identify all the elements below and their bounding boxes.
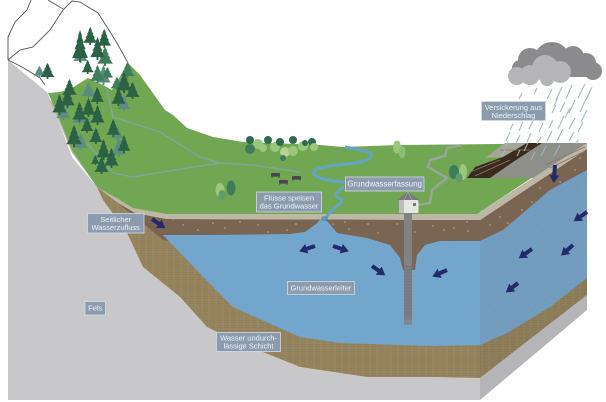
label: Seitlicher Wasserzufluss: Seitlicher [100,215,132,224]
label: Seitlicher Wasserzufluss: Wasserzufluss [91,223,140,232]
spring marker [322,217,327,220]
river [314,147,371,218]
label: Wasser undurchlässige Schicht: Wasser undurch- [220,334,277,342]
conifer forest [34,27,140,174]
label: Grundwasserfassung: Grundwasserfassung [347,180,422,189]
trees and cows [216,140,467,200]
deciduous tree cluster [245,136,318,161]
label: Flüsse speisen das Grundwasser: Flüsse speisen [264,194,314,202]
path to well [418,145,462,205]
mountain [8,0,128,113]
label: Grundwasserleiter [288,282,354,294]
well shaft [404,212,412,325]
label: Grundwasserfassung [346,177,424,191]
label: Seitlicher Wasserzufluss [88,214,144,233]
infiltration field [467,143,587,178]
beige strip [48,97,587,220]
flow arrows [152,165,587,290]
gravel soil layer [118,149,587,285]
aquifer water [163,170,587,346]
label: Versickerung aus Niederschlag: Versickerung aus [485,103,543,112]
rain [502,84,592,160]
label: Versickerung aus Niederschlag: Niederschlag [492,111,535,120]
label: Fels: Fels [88,304,103,313]
green landscape [48,63,587,214]
impermeable layer [97,187,587,378]
mountain streams [87,90,300,177]
label: Versickerung aus Niederschlag [482,102,546,120]
label: Fels [85,302,106,315]
label: Flüsse speisen das Grundwasser [256,192,322,212]
label: Wasser undurchlässige Schicht: lässige Schicht [223,342,274,351]
well house [397,192,420,213]
cloud [508,42,602,86]
label: Flüsse speisen das Grundwasser: das Grundwasser [260,202,319,210]
label: Wasser undurchlässige Schicht [216,332,280,352]
label: Grundwasserleiter: Grundwasserleiter [291,284,352,293]
